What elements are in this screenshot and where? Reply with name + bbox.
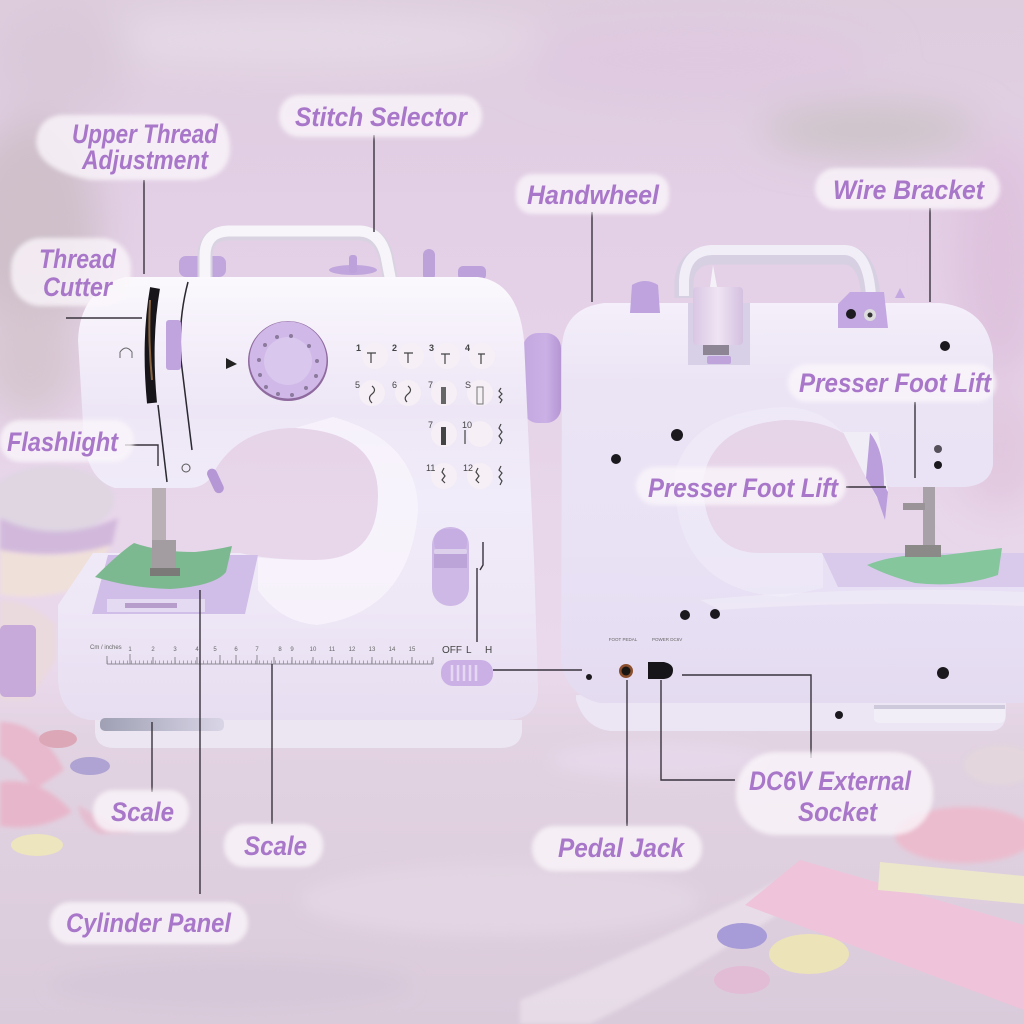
label: Stitch Selector bbox=[279, 95, 482, 137]
label: Cylinder Panel: Cylinder Panel bbox=[66, 908, 231, 938]
label: Scale left bbox=[93, 790, 189, 832]
scene: right props bbox=[520, 745, 1024, 1024]
clip left bbox=[630, 281, 660, 313]
label: Presser Foot Lift upper: Presser Foot Lift bbox=[799, 368, 992, 398]
ruler scale: Cm / inches bbox=[90, 645, 122, 651]
label: Presser Foot Lift lower: Presser Foot Lift bbox=[648, 473, 839, 503]
stitch chart: 12 bbox=[463, 463, 473, 473]
handwheel bbox=[523, 333, 561, 423]
label: Pedal Jack: Pedal Jack bbox=[558, 833, 686, 863]
wire bracket bbox=[838, 292, 888, 328]
speed slider bbox=[432, 527, 469, 606]
handle bbox=[684, 255, 871, 298]
label: Flashlight: Flashlight bbox=[7, 427, 119, 457]
label: Thread Cutter: Thread bbox=[39, 244, 116, 274]
top knobs bbox=[179, 256, 226, 277]
stitch chart: 3 bbox=[429, 343, 434, 353]
ruler scale: 6 bbox=[234, 647, 238, 653]
ruler scale: 11 bbox=[329, 647, 336, 653]
label: DC6V External Socket: DC6V External bbox=[749, 766, 911, 796]
stitch chart: 4 bbox=[465, 343, 470, 353]
label: Scale center bbox=[224, 824, 323, 867]
ruler scale: 5 bbox=[213, 647, 217, 653]
label: Thread Cutter bbox=[11, 238, 131, 306]
body bbox=[58, 277, 538, 720]
label: Wire Bracket bbox=[815, 168, 1000, 209]
ruler scale: 2 bbox=[151, 647, 155, 653]
label: Handwheel bbox=[516, 174, 669, 214]
ruler scale: 3 bbox=[173, 647, 177, 653]
stitch chart: 10 bbox=[462, 420, 472, 430]
fabric bbox=[95, 543, 232, 589]
label: Stitch Selector: Stitch Selector bbox=[295, 102, 468, 132]
label: Pedal Jack bbox=[532, 826, 702, 871]
presser lift bbox=[843, 432, 888, 520]
label: Scale left: Scale bbox=[111, 797, 174, 827]
holes bbox=[586, 341, 950, 719]
jack labels: FOOT PEDAL bbox=[609, 637, 638, 642]
ruler scale: 12 bbox=[349, 647, 356, 653]
ruler scale: 14 bbox=[389, 647, 396, 653]
label: Handwheel: Handwheel bbox=[527, 180, 659, 210]
spool niche bbox=[688, 303, 750, 365]
switch: OFF bbox=[442, 645, 462, 656]
needle bar bbox=[152, 488, 166, 550]
thread path bbox=[150, 288, 155, 403]
leader lines bbox=[66, 135, 930, 894]
ruler scale: 9 bbox=[290, 647, 294, 653]
switch: L bbox=[466, 645, 472, 656]
arm ring highlight bbox=[675, 407, 843, 597]
pedal jack bbox=[619, 664, 633, 678]
ruler scale: 13 bbox=[369, 647, 376, 653]
label: Wire Bracket: Wire Bracket bbox=[833, 175, 985, 205]
stitch chart: 6 bbox=[392, 380, 397, 390]
stitch chart: 5 bbox=[355, 380, 360, 390]
label: DC6V External Socket: Socket bbox=[798, 797, 878, 827]
label: Upper Thread Adjustment: Adjustment bbox=[81, 145, 209, 175]
right sewing machine: POWER DC6V bbox=[652, 637, 682, 642]
switch bbox=[441, 645, 493, 686]
stitch chart bbox=[355, 343, 502, 489]
body bbox=[561, 303, 1024, 703]
stitch dial bbox=[248, 321, 328, 401]
scene: left props bbox=[0, 466, 135, 856]
ruler scale: 10 bbox=[310, 647, 317, 653]
cylinder panel bbox=[92, 555, 258, 614]
handle bbox=[205, 233, 391, 282]
stitch chart: 7 bbox=[428, 420, 433, 430]
needle bar bbox=[923, 487, 935, 547]
fabric bbox=[867, 548, 1002, 584]
ruler scale: 4 bbox=[195, 647, 199, 653]
plate bbox=[822, 553, 1024, 587]
ruler scale: 8 bbox=[278, 647, 282, 653]
foot bbox=[576, 695, 1006, 731]
stitch chart: 2 bbox=[392, 343, 397, 353]
ruler scale: 15 bbox=[409, 647, 416, 653]
ruler scale: 1 bbox=[128, 647, 132, 653]
label: Flashlight bbox=[0, 420, 134, 462]
right sewing machine bbox=[561, 250, 1024, 731]
ruler scale bbox=[90, 645, 433, 664]
left sewing machine bbox=[58, 231, 561, 748]
stitch chart: S bbox=[465, 380, 471, 390]
label: Upper Thread Adjustment bbox=[36, 115, 230, 180]
label: DC6V External Socket bbox=[736, 752, 933, 835]
stitch chart: 7 bbox=[428, 380, 433, 390]
ruler scale: 7 bbox=[255, 647, 259, 653]
stitch chart: 1 bbox=[356, 343, 361, 353]
label: Upper Thread Adjustment: Upper Thread bbox=[72, 119, 218, 149]
dc socket bbox=[648, 662, 673, 679]
arm ring highlight bbox=[240, 417, 418, 625]
switch: H bbox=[485, 645, 492, 656]
foot bbox=[95, 720, 522, 748]
label: Thread Cutter: Cutter bbox=[43, 272, 113, 302]
stitch chart: 11 bbox=[426, 463, 435, 473]
label: Scale center: Scale bbox=[244, 831, 307, 861]
label: Cylinder Panel bbox=[50, 902, 248, 944]
spool bbox=[693, 287, 743, 345]
